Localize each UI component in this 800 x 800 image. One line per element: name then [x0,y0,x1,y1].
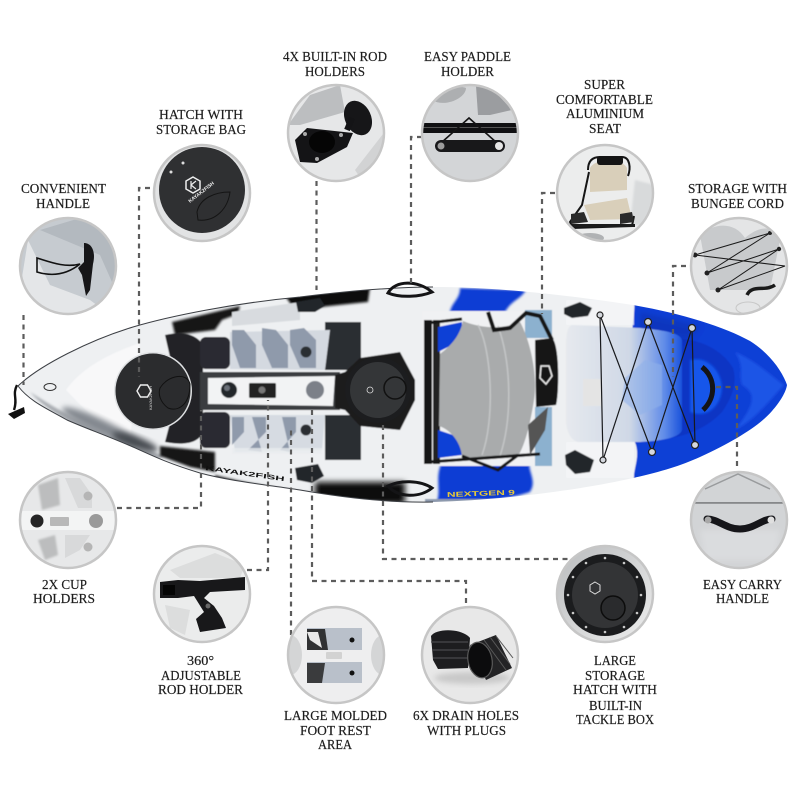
dashed leader lines [24,137,737,635]
tank well star mark [622,360,662,415]
label: foot rest [284,708,387,752]
stern tank well [566,325,682,442]
label: rod holders: 4X BUILT-IN ROD [283,49,387,64]
second hatch [345,357,411,423]
hull body [19,287,787,502]
stern carry handle [702,367,713,410]
label: drain holes [413,708,519,738]
label: seat: ALUMINIUM [566,106,644,121]
hull edge [18,287,433,502]
label: seat: SUPER [584,77,626,92]
icon: foot rest [289,608,383,702]
blue stern section [632,305,787,478]
label: large storage hatch: TACKLE BOX [576,712,654,727]
label: seat [556,77,653,136]
label: easy carry handle: HANDLE [716,591,769,606]
label: easy carry handle [703,577,782,606]
icon: cup holders [20,472,116,568]
callout: cup holders [20,472,116,606]
kayak [8,282,787,503]
bungee cords [597,312,698,463]
hull lettering: KAYAK2FISH [205,465,286,483]
label: hatch with storage bag: HATCH WITH [159,107,243,122]
label: bungee storage: BUNGEE CORD [691,196,784,211]
footwell dark frames [165,322,361,460]
label: paddle holder: HOLDER [441,64,495,79]
center console [208,346,335,436]
label: foot rest: FOOT REST [300,723,372,738]
bow toggle cord [8,384,56,419]
label: bungee storage: STORAGE WITH [688,181,787,196]
label: adjustable rod holder: 360° [187,653,214,668]
label: cup holders: 2X CUP [42,577,87,592]
icon: carry handle [690,472,787,568]
label: drain holes: 6X DRAIN HOLES [413,708,519,723]
label: paddle holder [424,49,511,79]
label: cup holders [33,577,95,606]
label: adjustable rod holder: ROD HOLDER [158,682,244,697]
label: convenient handle: CONVENIENT [21,181,107,196]
bow camouflage [30,288,405,504]
label: hatch with storage bag [156,107,246,137]
label: large storage hatch: BUILT-IN [589,698,642,713]
label: seat: SEAT [589,121,622,136]
callout: drain holes [413,607,519,738]
label: cup holders: HOLDERS [33,591,95,606]
foot rest ridges top [230,330,330,370]
warning sticker [594,380,601,406]
label: bungee storage [688,181,787,211]
callout: seat [556,77,655,243]
icon: aluminium seat [557,145,655,243]
callout: large storage hatch [557,546,657,727]
label: rod holders: HOLDERS [305,64,365,79]
label: adjustable rod holder [158,653,244,697]
label: rod holders [283,49,387,79]
side handles [388,283,432,495]
label: large storage hatch: HATCH WITH [573,682,657,697]
label: large storage hatch: STORAGE [585,668,645,683]
label: large storage hatch: LARGE [594,653,636,668]
icon: paddle holder [422,85,519,181]
label: convenient handle [21,181,107,211]
big front hatch [114,352,192,430]
label: adjustable rod holder: ADJUSTABLE [161,668,241,683]
second hatch surround [335,352,415,430]
callout: rod holders [283,49,390,185]
label: foot rest: AREA [318,737,352,752]
icon: hatch: KAYAK2FISH [188,181,216,205]
label: paddle holder: EASY PADDLE [424,49,511,64]
callout: easy carry handle [690,472,787,606]
icon: convenient handle [20,218,120,315]
stern rod holders [295,298,594,483]
callout: bungee storage [688,181,787,314]
icon: rod holder [289,86,383,180]
label: convenient handle: HANDLE [36,196,90,211]
label: large storage hatch [573,653,657,727]
callout: paddle holder [422,49,519,181]
big front hatch: KAYAK2FISH [148,386,153,410]
callout: hatch with storage bag [154,107,250,241]
icon: bungee storage [691,218,787,314]
blue camouflage midship [425,288,535,504]
callout: convenient handle [20,181,120,315]
foot rest ridges bottom [230,415,325,452]
label: foot rest: LARGE MOLDED [284,708,387,723]
model name: NEXTGEN 9 [447,490,515,499]
icon: large hatch [557,546,653,642]
callout: adjustable rod holder [154,546,250,697]
icon: drain plugs [422,607,518,703]
label: drain holes: WITH PLUGS [427,723,506,738]
icon: adjustable rod holder [154,546,250,642]
callout: foot rest [284,606,386,750]
label: hatch with storage bag: STORAGE BAG [156,122,246,137]
label: easy carry handle: EASY CARRY [703,577,782,592]
label: seat: COMFORTABLE [556,92,653,107]
seat area [422,310,558,470]
